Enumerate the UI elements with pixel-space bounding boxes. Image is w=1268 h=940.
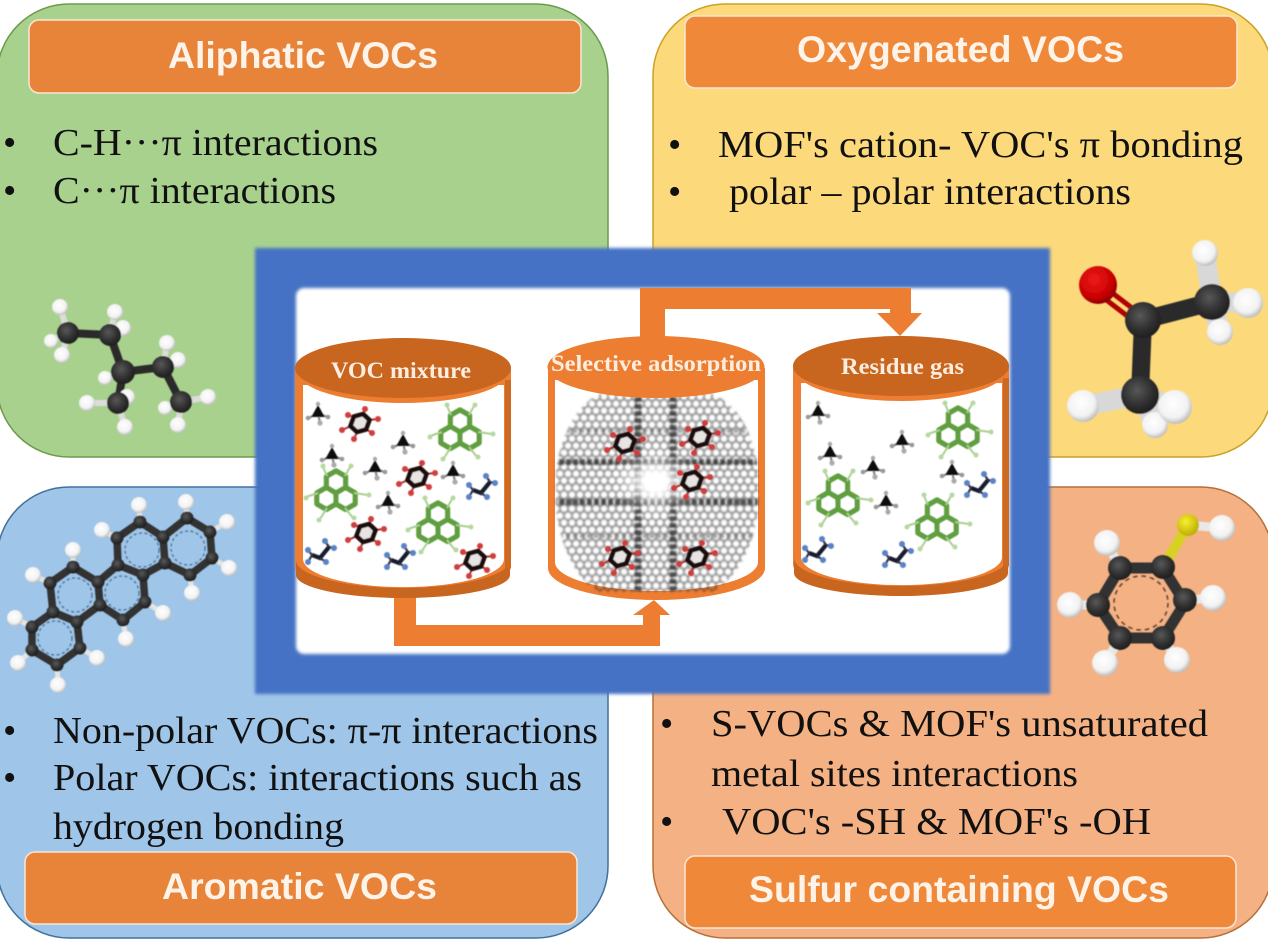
panel: aromatic VOCs [0, 487, 608, 938]
text: oxygenated interactions: MOF's cation- VOC's π bonding [718, 124, 1243, 166]
heading: Aromatic VOCs: Aromatic VOCs [162, 866, 437, 907]
panel: sulfur containing VOCs [653, 487, 1268, 938]
text: aromatic interactions: Non-polar VOCs: π-π interactions [53, 710, 598, 752]
icon: aliphatic molecule [44, 299, 216, 435]
cylinder: selective adsorption [548, 336, 765, 600]
panel: aliphatic VOCs [0, 4, 608, 457]
text: aliphatic interactions: • [3, 122, 16, 164]
heading: Oxygenated VOCs [685, 16, 1237, 88]
label: VOC mixture: VOC mixture [331, 358, 471, 383]
heading: Sulfur containing VOCs [685, 856, 1236, 928]
heading: Aromatic VOCs [25, 852, 577, 924]
text: sulfur interactions: S-VOCs & MOF's unsaturated [711, 703, 1208, 745]
text: oxygenated interactions: • [668, 171, 681, 213]
text: aromatic interactions: hydrogen bonding [53, 806, 344, 848]
arrow: top to residue gas [640, 288, 922, 342]
arrow: bottom to selective adsorption [394, 590, 670, 646]
heading: Aliphatic VOCs: Aliphatic VOCs [168, 35, 438, 76]
text: sulfur interactions [660, 703, 1208, 843]
icon: thiol molecule [1057, 514, 1235, 676]
text: aromatic interactions [3, 710, 598, 848]
text: oxygenated interactions: • [668, 124, 681, 166]
text: aliphatic interactions: C-H···π interactions [53, 122, 378, 164]
text: sulfur interactions: metal sites interactions [711, 753, 1078, 795]
label: Residue gas: Residue gas [841, 354, 964, 379]
molecules: mixture contents [304, 402, 498, 579]
cylinder: VOC mixture [295, 338, 511, 598]
text: aliphatic interactions [3, 122, 378, 212]
heading: Aliphatic VOCs [29, 20, 581, 93]
MOF lattice [550, 388, 765, 598]
text: sulfur interactions: • [660, 703, 673, 745]
icon: aromatic molecule [7, 494, 237, 693]
molecules: residue contents [802, 400, 996, 568]
text: oxygenated interactions [668, 124, 1243, 213]
text: sulfur interactions: • [660, 801, 673, 843]
panel: central process frame [255, 248, 1050, 694]
text: aliphatic interactions: • [3, 170, 16, 212]
text: sulfur interactions: VOC's -SH & MOF's -OH [722, 801, 1151, 843]
text: aromatic interactions: • [3, 757, 16, 799]
text: aromatic interactions: • [3, 710, 16, 752]
molecules: adsorbed [599, 420, 721, 576]
heading: Oxygenated VOCs: Oxygenated VOCs [797, 29, 1124, 70]
cylinder: Residue gas [793, 336, 1009, 596]
text: oxygenated interactions: polar – polar interactions [729, 171, 1131, 213]
text: aliphatic interactions: C···π interactions [53, 170, 336, 212]
panel: oxygenated VOCs [653, 4, 1268, 457]
heading: Sulfur containing VOCs: Sulfur containing VOCs [749, 869, 1169, 910]
label: Selective adsorption: Selective adsorption [551, 351, 761, 376]
text: aromatic interactions: Polar VOCs: interactions such as [53, 757, 582, 799]
icon: acetone molecule [1067, 240, 1263, 438]
